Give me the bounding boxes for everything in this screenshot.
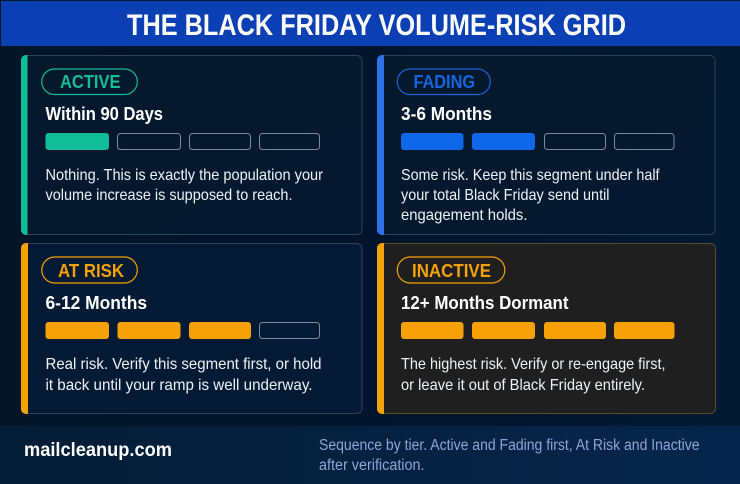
- timeframe heading: Within 90 Days: [46, 103, 163, 124]
- risk meter: 2 of 4: [401, 133, 674, 150]
- badge: at risk: [42, 257, 137, 283]
- timeframe heading: 3-6 Months: [401, 103, 492, 124]
- panel: active: [21, 55, 362, 235]
- panel: at risk: [21, 243, 362, 414]
- description: [401, 167, 660, 224]
- description: it back until your ramp is well underway.: [46, 377, 312, 394]
- risk meter: 1 of 4: [46, 133, 320, 150]
- description: [46, 167, 324, 204]
- badge: active: [42, 69, 137, 94]
- footer band: [0, 426, 740, 484]
- timeframe heading: 6-12 Months: [46, 292, 147, 313]
- risk meter: 3 of 4: [46, 322, 320, 339]
- footer note: after verification.: [319, 457, 424, 474]
- brand: mailcleanup.com: [24, 439, 172, 461]
- badge: fading: [397, 69, 490, 94]
- panel: inactive: [377, 243, 716, 414]
- badge: inactive: [397, 257, 505, 283]
- description: engagement holds.: [401, 207, 528, 224]
- title banner: [1, 1, 740, 46]
- badge: active: ACTIVE: [60, 71, 120, 92]
- description: Nothing. This is exactly the population your: [46, 167, 324, 184]
- description: [46, 356, 322, 394]
- description: Some risk. Keep this segment under half: [401, 167, 660, 184]
- description: Real risk. Verify this segment first, or hold: [46, 356, 322, 373]
- description: The highest risk. Verify or re-engage first,: [401, 356, 666, 373]
- footer note: [319, 437, 700, 474]
- badge: fading: FADING: [414, 71, 475, 92]
- panel: fading: [377, 55, 715, 235]
- title banner: THE BLACK FRIDAY VOLUME-RISK GRID: [127, 9, 626, 42]
- badge: inactive: INACTIVE: [412, 260, 491, 281]
- description: or leave it out of Black Friday entirely.: [401, 377, 645, 394]
- timeframe heading: 12+ Months Dormant: [401, 292, 568, 313]
- footer note: Sequence by tier. Active and Fading first, At Risk and Inactive: [319, 437, 700, 454]
- risk meter: 4 of 4: [401, 322, 674, 339]
- badge: at risk: AT RISK: [58, 260, 125, 281]
- description: [401, 356, 666, 394]
- description: your total Black Friday send until: [401, 187, 610, 204]
- description: volume increase is supposed to reach.: [46, 187, 292, 204]
